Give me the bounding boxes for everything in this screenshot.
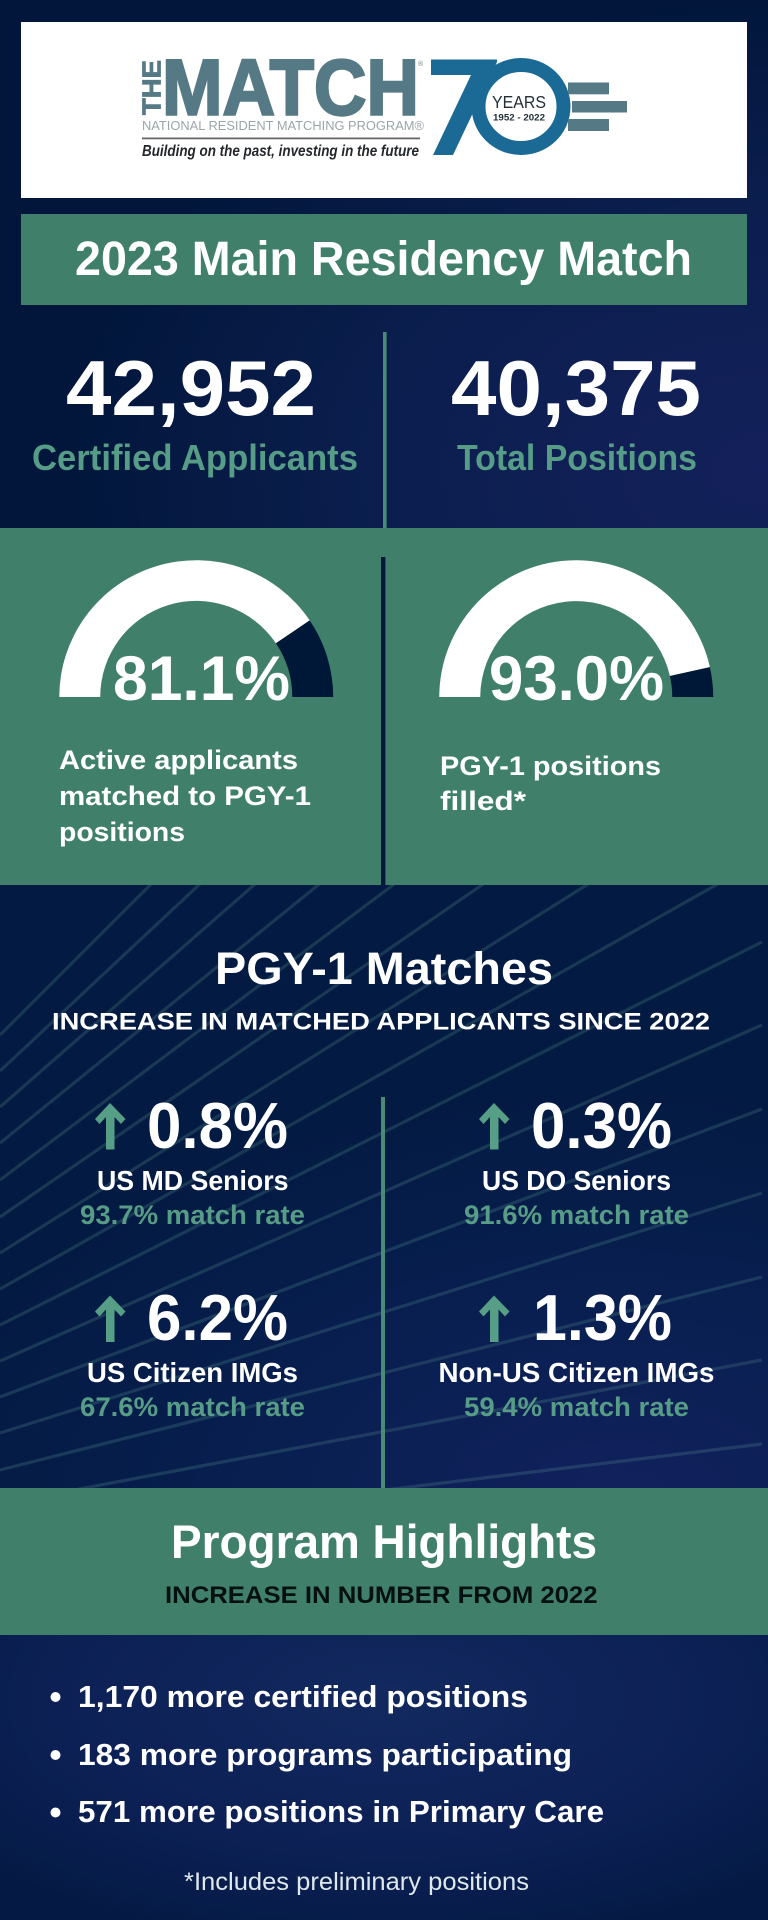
stat: US DO Seniors: US DO Seniors	[482, 1165, 671, 1196]
logo: date range: 1952 - 2022	[493, 112, 545, 124]
gauge caption: active applicants	[59, 745, 311, 847]
gauge divider	[381, 557, 385, 885]
background: top navy	[0, 0, 768, 528]
gauge caption: active applicants: matched to PGY-1	[59, 781, 311, 811]
background: bottom navy	[0, 1635, 768, 1920]
panel: title banner	[21, 214, 747, 305]
icon: up arrow	[479, 1103, 510, 1150]
panel: logo	[21, 22, 747, 198]
logo wordmark: THE: THE	[136, 60, 166, 115]
gauge caption: positions filled	[440, 751, 661, 816]
stat: US MD Seniors: 0.8%	[147, 1089, 288, 1162]
matches divider	[381, 1097, 385, 1488]
stat: US DO Seniors	[464, 1089, 689, 1230]
stat: total positions: Total Positions	[457, 437, 697, 478]
stat: US DO Seniors: 91.6% match rate	[464, 1200, 689, 1230]
logo wordmark: MATCH: MATCH	[162, 42, 419, 132]
stat: US Citizen IMGs: 6.2%	[147, 1281, 288, 1354]
highlights list	[50, 1679, 604, 1829]
panel: gauges	[0, 528, 768, 885]
logo registered mark: ®	[418, 60, 424, 68]
stat: US MD Seniors	[80, 1089, 305, 1230]
stat: US Citizen IMGs	[80, 1281, 305, 1422]
icon: up arrow	[479, 1296, 510, 1342]
stat: certified applicants: 42,952	[66, 344, 316, 432]
stat: total positions: 40,375	[451, 344, 701, 432]
panel: headline stats	[32, 332, 701, 528]
heading: PGY-1 Matches: PGY-1 Matches	[215, 943, 553, 994]
icon: up arrow	[95, 1296, 126, 1342]
stat: US MD Seniors: 93.7% match rate	[80, 1200, 305, 1230]
stat: US DO Seniors: 0.3%	[531, 1089, 672, 1162]
gauge: 81.1 percent	[59, 560, 333, 847]
gauge: 93.0 percent	[439, 560, 713, 816]
stat: certified applicants	[32, 344, 358, 478]
stat: US Citizen IMGs: 67.6% match rate	[80, 1392, 305, 1422]
gauge caption: positions filled: PGY-1 positions	[440, 751, 661, 781]
stat: Non-US Citizen IMGs: 59.4% match rate	[464, 1392, 689, 1422]
stat: Non-US Citizen IMGs	[438, 1281, 714, 1422]
icon: up arrow	[95, 1103, 126, 1150]
stat: certified applicants: Certified Applicants	[32, 437, 358, 478]
stat: total positions	[451, 344, 701, 478]
logo: numeral 7	[431, 60, 497, 155]
bullet: certified positions: 1,170 more certified positions	[78, 1679, 528, 1714]
logo: YEARS: YEARS	[492, 92, 546, 112]
gauge caption: positions filled: filled*	[440, 786, 527, 816]
gauge: 93.0 percent: 93.0%	[489, 644, 664, 714]
gauge caption: active applicants: positions	[59, 817, 185, 847]
gauge caption: active applicants: Active applicants	[59, 745, 298, 775]
logo tagline: Building on the past, investing in the future	[142, 143, 419, 160]
bullet: primary care: 571 more positions in Primary Care	[78, 1794, 604, 1829]
bullet: programs participating: 183 more programs participating	[78, 1737, 572, 1772]
logo rule	[142, 138, 420, 139]
title: 2023 Main Residency Match	[75, 233, 692, 286]
stat: US Citizen IMGs: US Citizen IMGs	[87, 1357, 298, 1388]
stat: Non-US Citizen IMGs: 1.3%	[533, 1281, 672, 1354]
logo: bars	[568, 82, 627, 131]
footnote: *Includes preliminary positions	[184, 1868, 529, 1896]
logo: ring with years	[478, 65, 564, 148]
stat: Non-US Citizen IMGs: Non-US Citizen IMGs	[438, 1357, 714, 1388]
logo subtitle: NATIONAL RESIDENT MATCHING PROGRAM®	[142, 118, 424, 133]
subheading: increase from 2022: INCREASE IN NUMBER FROM 2022	[165, 1582, 598, 1609]
background: middle navy	[0, 884, 768, 1489]
stat divider	[383, 332, 387, 528]
panel: program highlights banner	[0, 1488, 768, 1635]
stat: US MD Seniors: US MD Seniors	[97, 1165, 288, 1196]
heading: Program Highlights: Program Highlights	[171, 1515, 597, 1568]
gauge: 81.1 percent: 81.1%	[113, 644, 290, 714]
subheading: increase since 2022: INCREASE IN MATCHED APPLICANTS SINCE 2022	[52, 1008, 710, 1036]
